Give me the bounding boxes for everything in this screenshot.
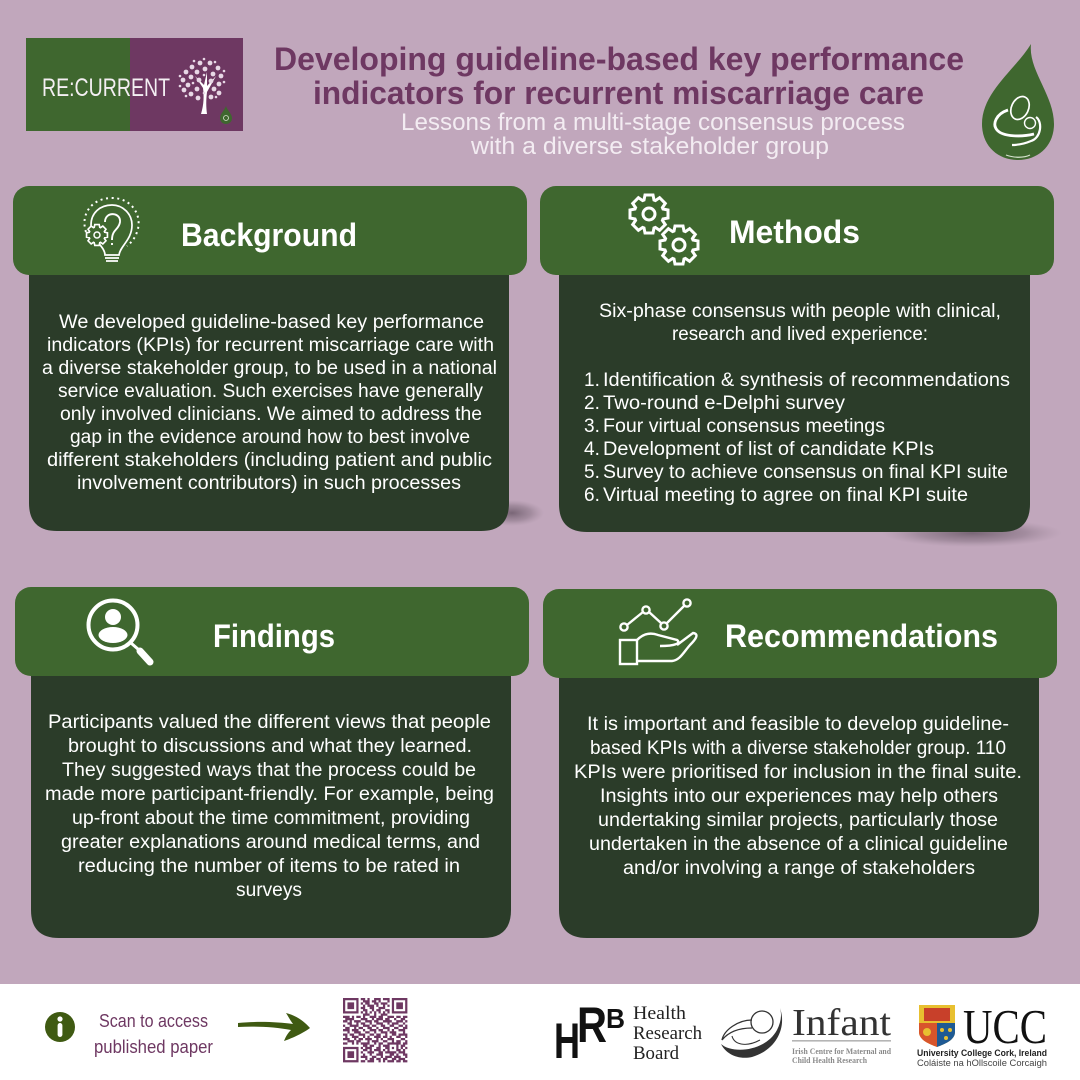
logo: Health Research Board: Health bbox=[633, 1003, 687, 1024]
text: findings body bbox=[45, 712, 494, 901]
title: Developing guideline-based key performance bbox=[274, 41, 964, 77]
logo: Infant: Irish Centre for Maternal and bbox=[792, 1047, 892, 1056]
heading: methods: Methods bbox=[729, 214, 860, 250]
shadow: background panel bbox=[480, 500, 544, 526]
list: six phases: Virtual meeting to agree on final KPI suite bbox=[603, 485, 968, 506]
icon: two gears bbox=[630, 195, 698, 264]
panel: recommendations bbox=[543, 589, 1057, 938]
text: recommendations body: and/or involving a range of stakeholders bbox=[623, 858, 975, 879]
QR code bbox=[343, 999, 407, 1061]
text: findings body: up-front about the time commitment, providing bbox=[72, 808, 470, 829]
logo: Health Research Board bbox=[554, 997, 702, 1069]
text: findings body: Participants valued the different views that people bbox=[48, 712, 491, 733]
text: background body: a diverse stakeholder group, to be used in a national bbox=[42, 358, 497, 379]
text: findings body: surveys bbox=[236, 880, 302, 901]
text: background body: indicators (KPIs) for recurrent miscarriage care with bbox=[47, 335, 494, 356]
text: scan to access bbox=[94, 1011, 213, 1057]
text: recommendations body: based KPIs with a diverse stakeholder group. 110 bbox=[590, 738, 1006, 759]
icon: magnifier with person bbox=[88, 600, 150, 662]
list: six phases: 2. bbox=[584, 393, 600, 414]
list: six phases: Identification & synthesis of recommendations bbox=[603, 370, 1010, 391]
list: six phases: 4. bbox=[584, 439, 600, 460]
text: scan to access: published paper bbox=[94, 1037, 213, 1057]
logo: University College Cork: Coláiste na hOllscoile Corcaigh bbox=[917, 1058, 1047, 1068]
panel: findings bbox=[15, 587, 529, 938]
text: background body bbox=[42, 312, 497, 494]
text: findings body: They suggested ways that the process could be bbox=[62, 760, 476, 781]
title bbox=[274, 41, 964, 111]
list: six phases bbox=[584, 370, 1010, 506]
text: background body: service evaluation. Such exercises have generally bbox=[58, 381, 483, 402]
text: background body: gap in the evidence around how to best involve bbox=[70, 427, 470, 448]
icon: green drop with mother and child bbox=[982, 44, 1054, 160]
logo: Health Research Board: Board bbox=[633, 1043, 679, 1064]
icon: light bulb with question mark and gear bbox=[84, 198, 139, 261]
logo: Infant bbox=[721, 1002, 892, 1065]
heading: background: Background bbox=[181, 217, 357, 253]
arrow to QR code bbox=[238, 1013, 310, 1041]
list: six phases: 5. bbox=[584, 462, 600, 483]
logo: Infant: Child Health Research bbox=[792, 1056, 868, 1065]
list: six phases: Two-round e-Delphi survey bbox=[603, 393, 846, 414]
title: indicators for recurrent miscarriage care bbox=[313, 75, 924, 111]
list: six phases: Development of list of candidate KPIs bbox=[603, 439, 934, 460]
logo: University College Cork: UCC bbox=[963, 999, 1047, 1054]
text: background body: involvement contributors) in such processes bbox=[77, 473, 461, 494]
logo: Health Research Board: B bbox=[606, 1003, 625, 1034]
text: recommendations body bbox=[574, 714, 1022, 879]
logo: University College Cork: University College Cork, Ireland bbox=[917, 1048, 1047, 1058]
text: methods intro bbox=[599, 301, 1001, 345]
text: background body: We developed guideline-based key performance bbox=[59, 312, 484, 333]
logo: RE:CURRENT bbox=[26, 38, 243, 131]
text: recommendations body: undertaking similar projects, particularly those bbox=[598, 810, 998, 831]
list: six phases: 1. bbox=[584, 370, 600, 391]
footer band bbox=[0, 984, 1080, 1080]
text: findings body: reducing the number of items to be rated in bbox=[78, 856, 460, 877]
text: findings body: greater explanations around medical terms, and bbox=[61, 832, 480, 853]
text: recommendations body: KPIs were prioritised for inclusion in the final suite. bbox=[574, 762, 1022, 783]
text: recommendations body: It is important and feasible to develop guideline- bbox=[587, 714, 1009, 735]
subtitle: with a diverse stakeholder group bbox=[470, 133, 829, 160]
list: six phases: 6. bbox=[584, 485, 600, 506]
icon: hand holding line chart bbox=[620, 599, 696, 664]
panel: methods bbox=[540, 186, 1054, 532]
text: methods intro: Six-phase consensus with people with clinical, bbox=[599, 301, 1001, 322]
text: findings body: made more participant-friendly. For example, being bbox=[45, 784, 494, 805]
heading: findings: Findings bbox=[213, 618, 335, 654]
text: recommendations body: undertaken in the absence of a clinical guideline bbox=[589, 834, 1008, 855]
subtitle: Lessons from a multi-stage consensus process bbox=[401, 109, 905, 136]
shadow: methods panel bbox=[882, 519, 1062, 547]
text: scan to access: Scan to access bbox=[99, 1011, 208, 1031]
text: background body: different stakeholders (including patient and public bbox=[47, 450, 492, 471]
logo: Infant: Infant bbox=[792, 1002, 891, 1044]
panel: background bbox=[13, 186, 527, 531]
text: background body: only involved clinicians. We aimed to address the bbox=[60, 404, 482, 425]
text: methods intro: research and lived experience: bbox=[672, 324, 928, 345]
list: six phases: 3. bbox=[584, 416, 600, 437]
icon: information bbox=[45, 1012, 75, 1042]
logo: University College Cork bbox=[917, 999, 1047, 1068]
list: six phases: Four virtual consensus meetings bbox=[603, 416, 885, 437]
text: findings body: brought to discussions and what they learned. bbox=[68, 736, 472, 757]
list: six phases: Survey to achieve consensus on final KPI suite bbox=[603, 462, 1008, 483]
logo: Health Research Board: R bbox=[577, 997, 607, 1053]
logo: RE:CURRENT: RE:CURRENT bbox=[42, 74, 170, 102]
logo: Health Research Board: H bbox=[554, 1013, 580, 1069]
logo: Health Research Board: Research bbox=[633, 1023, 702, 1044]
text: recommendations body: Insights into our experiences may help others bbox=[600, 786, 998, 807]
subtitle bbox=[401, 109, 905, 160]
heading: recommendations: Recommendations bbox=[725, 618, 998, 654]
